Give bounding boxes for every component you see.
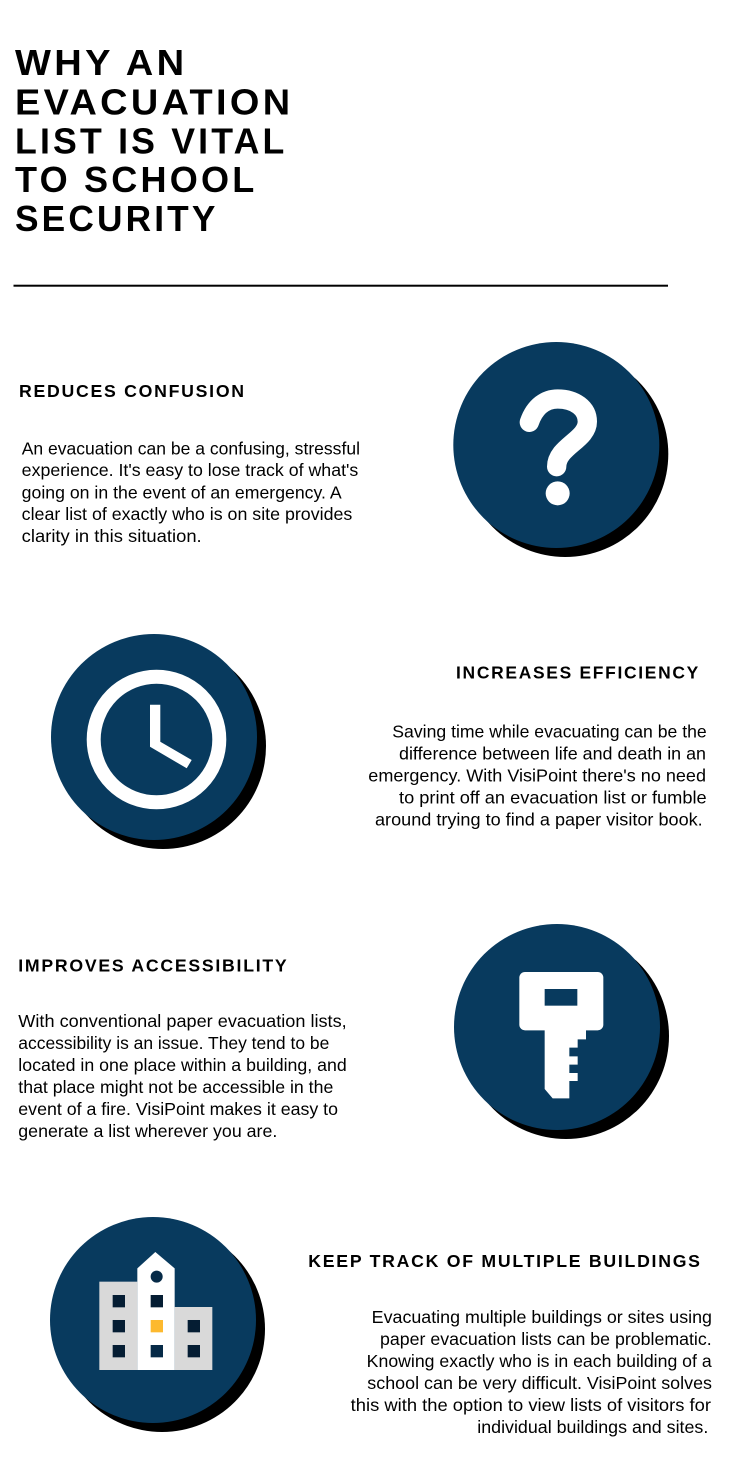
- panel: increases efficiency: [51, 634, 707, 849]
- text block: improves accessibility: [18, 1011, 347, 1141]
- text block: improves accessibility: event of a fire. VisiPoint makes it easy to: [18, 1099, 338, 1119]
- text block: reduces confusion: clarity in this situation.: [22, 526, 202, 546]
- icon: question mark badge: [453, 342, 668, 557]
- text block: improves accessibility: With conventional paper evacuation lists,: [18, 1011, 347, 1031]
- text block: keep track of multiple buildings: paper evacuation lists can be problematic.: [380, 1329, 712, 1349]
- panel: reduces confusion: [19, 342, 668, 557]
- text block: improves accessibility: that place might not be accessible in the: [18, 1077, 333, 1097]
- text block: keep track of multiple buildings: [351, 1307, 712, 1437]
- heading: reduces confusion: REDUCES CONFUSION: [19, 381, 246, 401]
- panel: improves accessibility: [18, 924, 669, 1141]
- text block: increases efficiency: emergency. With VisiPoint there's no need: [368, 766, 706, 786]
- text block: keep track of multiple buildings: individual buildings and sites.: [477, 1417, 708, 1437]
- panel: keep track of multiple buildings: [50, 1217, 712, 1437]
- text block: reduces confusion: [22, 438, 360, 546]
- heading: increases efficiency: INCREASES EFFICIENCY: [456, 663, 700, 683]
- icon: building badge: [50, 1217, 265, 1432]
- text block: reduces confusion: going on in the event of an emergency. A: [22, 482, 342, 502]
- text block: improves accessibility: located in one place within a building, and: [18, 1055, 347, 1075]
- text block: keep track of multiple buildings: school can be very difficult. VisiPoint solves: [367, 1373, 712, 1393]
- title: [15, 42, 294, 239]
- icon: clock badge: [51, 634, 266, 849]
- title: EVACUATION: [15, 81, 294, 122]
- title: WHY AN: [15, 42, 188, 83]
- text block: reduces confusion: An evacuation can be a confusing, stressful: [22, 438, 360, 458]
- text block: reduces confusion: clear list of exactly who is on site provides: [22, 504, 352, 524]
- text block: keep track of multiple buildings: this with the option to view lists of visitors for: [351, 1395, 711, 1415]
- icon: key badge: [454, 924, 669, 1139]
- text block: keep track of multiple buildings: Evacuating multiple buildings or sites using: [372, 1307, 712, 1327]
- text block: keep track of multiple buildings: Knowing exactly who is in each building of a: [367, 1351, 712, 1371]
- title: TO SCHOOL: [15, 159, 258, 200]
- text block: improves accessibility: generate a list wherever you are.: [18, 1121, 277, 1141]
- text block: increases efficiency: Saving time while evacuating can be the: [392, 722, 707, 742]
- text block: increases efficiency: [368, 722, 707, 830]
- title: LIST IS VITAL: [15, 120, 288, 161]
- text block: increases efficiency: around trying to find a paper visitor book.: [375, 810, 703, 830]
- title: SECURITY: [15, 198, 218, 239]
- text block: increases efficiency: to print off an evacuation list or fumble: [399, 788, 707, 808]
- text block: increases efficiency: difference between life and death in an: [399, 744, 706, 764]
- text block: reduces confusion: experience. It's easy to lose track of what's: [22, 460, 358, 480]
- heading: improves accessibility: IMPROVES ACCESSIBILITY: [18, 955, 288, 975]
- heading: keep track of multiple buildings: KEEP TRACK OF MULTIPLE BUILDINGS: [308, 1251, 702, 1271]
- text block: improves accessibility: accessibility is an issue. They tend to be: [18, 1033, 329, 1053]
